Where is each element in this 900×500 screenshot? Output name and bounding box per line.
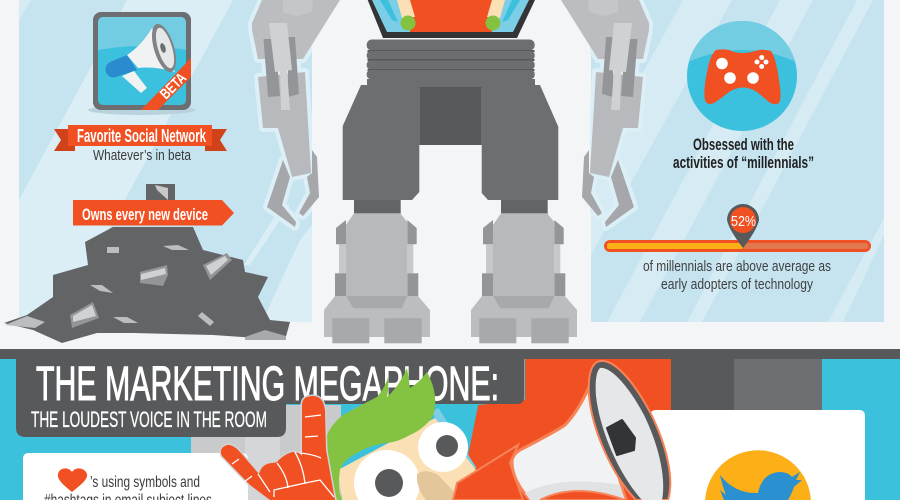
- panel: marketing megaphone background: [0, 359, 900, 500]
- pin: 52%: [727, 204, 759, 248]
- icon: beta megaphone app: [88, 12, 196, 115]
- text: obsessed with millennials: [673, 135, 814, 172]
- icon: heart: [58, 468, 87, 492]
- card: left email text: [23, 453, 248, 500]
- icon: game controller: [687, 21, 797, 131]
- robot: left arm: [252, 0, 340, 227]
- robot arm glow left: [252, 0, 340, 227]
- icon: large megaphone: [453, 361, 670, 500]
- robot arm glow right: [561, 0, 649, 227]
- pin: 52%: 52%: [731, 213, 756, 230]
- subheading: THE LOUDEST VOICE IN THE ROOM: [31, 407, 267, 432]
- ribbon: favorite social network: Favorite Social Network: [77, 126, 207, 146]
- banner: owns every new device: [73, 200, 234, 226]
- ribbon: favorite social network: [54, 125, 227, 151]
- cone: [512, 385, 626, 500]
- robot left leg: [324, 200, 430, 343]
- bell inner: [596, 368, 663, 500]
- handle: [453, 445, 523, 500]
- robot: body: [324, 0, 577, 343]
- text: whatever's in beta: Whatever’s in beta: [93, 147, 192, 164]
- robot: right arm: [561, 0, 649, 227]
- icon: rock hand: [221, 396, 335, 500]
- icon: beta megaphone app: BETA: [157, 70, 190, 103]
- robot right leg: [471, 200, 577, 343]
- robot waist bands: [367, 40, 535, 88]
- heading: THE MARKETING MEGAPHONE:: [36, 358, 499, 411]
- text: early adopters statistic: of millennials are above average as: [643, 258, 831, 275]
- character: head: [325, 368, 478, 500]
- banner: owns every new device: Owns every new device: [82, 205, 208, 224]
- text: obsessed with millennials: activities of “millennials”: [673, 153, 814, 172]
- white centre backing: [312, 0, 590, 349]
- device pile: [4, 184, 290, 343]
- hair: [325, 368, 435, 500]
- icon: twitter bird: [705, 450, 811, 500]
- title tag: [16, 358, 524, 437]
- text: obsessed with millennials: Obsessed with the: [693, 135, 794, 154]
- robot hips: [343, 79, 558, 200]
- text: early adopters statistic: early adopters of technology: [661, 276, 813, 293]
- nose: [417, 471, 462, 500]
- card: right twitter: [650, 410, 865, 500]
- eye: left: [354, 450, 420, 500]
- progress bar 52%: [604, 204, 871, 252]
- panel: right blue background: [591, 0, 884, 322]
- card: left email text: ’s using symbols and: [90, 474, 200, 491]
- robot cockpit: [368, 0, 535, 38]
- divider bar: [0, 349, 900, 359]
- bell rim: [589, 361, 670, 500]
- text: early adopters statistic: [643, 258, 831, 293]
- driver: [607, 420, 635, 455]
- panel: left blue background: [19, 0, 312, 322]
- eye: right: [418, 422, 468, 472]
